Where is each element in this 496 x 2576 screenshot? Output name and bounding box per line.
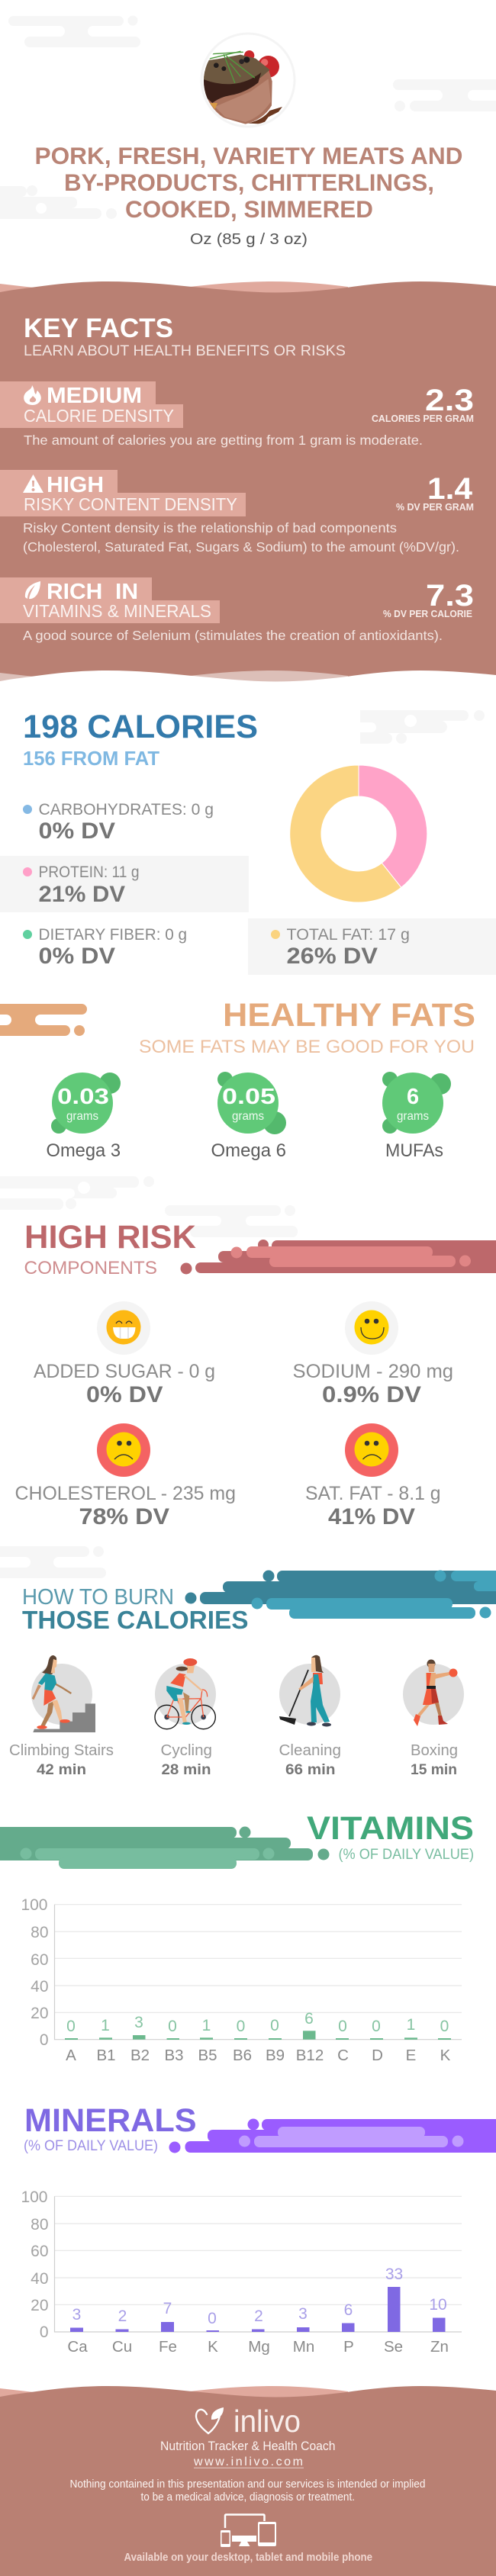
fact: high risky content density: Risky Content density is the relationship of bad components [23, 520, 397, 535]
activity: cleaning [279, 1655, 341, 1778]
heading: high risk: HIGH RISK [24, 1219, 196, 1256]
bar chart: vitamins: B1 [96, 2047, 116, 2064]
bar chart: vitamins: A [66, 2047, 76, 2064]
fat badge: omega 6: Omega 6 [211, 1140, 286, 1161]
bar chart: minerals: 2 [254, 2307, 263, 2325]
fat badge: omega 6: grams [232, 1110, 264, 1123]
bar chart: vitamins: 60 [31, 1951, 49, 1969]
bar chart: vitamins: 1 [407, 2016, 415, 2034]
bar chart: minerals: K [208, 2338, 218, 2356]
bar chart: vitamins [21, 1896, 462, 2064]
heading: key facts: KEY FACTS [24, 314, 173, 343]
bar chart: vitamins: 100 [21, 1896, 47, 1914]
risk item: sodium: 0.9% DV [322, 1382, 421, 1407]
panel: minerals [21, 2102, 462, 2356]
bar chart: vitamins: 0 [237, 2018, 245, 2035]
bar chart: vitamins: E [406, 2047, 416, 2064]
icon: woman climbing stairs [32, 1655, 95, 1732]
heading: how to burn: HOW TO BURN [22, 1585, 174, 1610]
legend: dietary fiber: DIETARY FIBER: 0 g [38, 926, 187, 944]
bar chart: minerals: 10 [429, 2296, 447, 2314]
activity: cycling: 28 min [162, 1761, 211, 1778]
bar chart: vitamins: C [337, 2047, 349, 2064]
icon: smiling face [354, 1311, 389, 1344]
fact: high risky content density: RISKY CONTENT DENSITY [24, 494, 237, 514]
activity: boxing: 15 min [411, 1761, 457, 1778]
fact: rich in vitamins and minerals [0, 577, 474, 643]
legend: carbohydrates: 0% DV [38, 818, 115, 844]
bar chart: vitamins: B3 [164, 2047, 184, 2064]
icon: leaf [25, 581, 40, 599]
bar chart: vitamins: 80 [31, 1924, 49, 1941]
fact: rich in vitamins and minerals: 7.3 [426, 579, 474, 613]
fact: medium calorie density: CALORIES PER GRAM [372, 413, 474, 424]
icon: boxer [414, 1660, 458, 1726]
activity: climbing stairs: Climbing Stairs [9, 1742, 114, 1759]
title: COOKED, SIMMERED [125, 195, 373, 223]
bar chart: vitamins: 0 [168, 2018, 177, 2035]
risk item: added sugar: 0% DV [86, 1382, 163, 1407]
bar chart: minerals: Fe [159, 2338, 177, 2356]
fat badge: omega 3: grams [66, 1110, 98, 1123]
activity: climbing stairs: 42 min [37, 1761, 86, 1778]
heading: vitamins: VITAMINS [307, 1810, 474, 1847]
fact: rich in vitamins and minerals: VITAMINS & MINERALS [23, 601, 211, 621]
fact: high risky content density: (Cholesterol, Saturated Fat, Sugars & Sodium) to the amount (%DV/gr). [23, 539, 459, 555]
fat badge: omega 6: 0.05 [222, 1085, 275, 1109]
fact: high risky content density: % DV PER GRAM [396, 502, 474, 513]
heading: how to burn: THOSE CALORIES [22, 1606, 249, 1634]
fact: rich in vitamins and minerals: % DV PER CALORIE [383, 609, 472, 619]
heading: calories [23, 709, 258, 770]
panel: calories [0, 709, 496, 975]
bar chart: minerals: 20 [31, 2297, 49, 2314]
risk item: saturated fat: SAT. FAT - 8.1 g [305, 1483, 441, 1504]
activity: boxing: Boxing [411, 1742, 458, 1759]
bar chart: minerals: 3 [298, 2305, 308, 2323]
heading: minerals: MINERALS [24, 2102, 197, 2139]
fat badge: omega 3 [46, 1073, 121, 1161]
heading: high risk [24, 1219, 196, 1278]
donut chart [290, 765, 427, 902]
risk item: cholesterol [15, 1423, 236, 1529]
bar chart: vitamins: B6 [233, 2047, 252, 2064]
icon: grinning face [107, 1311, 140, 1344]
heading: vitamins [307, 1810, 474, 1863]
bar chart: minerals: 0 [208, 2310, 217, 2327]
fat badge: omega 3: 0.03 [57, 1085, 109, 1109]
fat badge: mufas: 6 [407, 1085, 419, 1109]
legend: total fat [248, 918, 496, 975]
fact: rich in vitamins and minerals: RICH IN [47, 580, 138, 604]
risk item: added sugar: ADDED SUGAR - 0 g [34, 1361, 215, 1382]
legend: protein: PROTEIN: 11 g [38, 863, 139, 881]
panel: vitamins [21, 1810, 474, 2064]
panel: footer [0, 2386, 496, 2576]
logo: inlivo [196, 2404, 301, 2439]
bar chart: vitamins: 6 [304, 2010, 314, 2028]
bar chart: minerals: Zn [430, 2338, 449, 2356]
title [35, 142, 462, 223]
legend: total fat: 26% DV [287, 944, 378, 969]
icon: warning triangle [23, 474, 43, 493]
icon: devices [221, 2514, 276, 2547]
legend: total fat: TOTAL FAT: 17 g [287, 926, 410, 944]
fact: medium calorie density: 2.3 [425, 384, 474, 417]
disclaimer: Nothing contained in this presentation and our services is intended or implied [70, 2478, 426, 2491]
heading: how to burn [22, 1585, 249, 1634]
heading: key facts [24, 314, 346, 359]
bar chart: minerals: Ca [67, 2338, 88, 2356]
bar chart: minerals: 60 [31, 2243, 49, 2260]
bar chart: vitamins: 20 [31, 2005, 49, 2022]
fact: high risky content density [0, 470, 474, 555]
legend: carbohydrates: CARBOHYDRATES: 0 g [38, 801, 214, 818]
heading: key facts: LEARN ABOUT HEALTH BENEFITS OR RISKS [24, 343, 346, 359]
legend: protein: 21% DV [38, 882, 125, 907]
panel: healthy fats [46, 997, 475, 1161]
heading: calories: 198 CALORIES [23, 709, 258, 745]
bar chart: vitamins: 40 [31, 1978, 49, 1996]
bar chart: minerals: 7 [163, 2300, 172, 2317]
bar chart: minerals: P [343, 2338, 354, 2356]
bar chart: minerals: Se [384, 2338, 403, 2356]
risk item: sodium: SODIUM - 290 mg [293, 1361, 453, 1382]
fact: medium calorie density [0, 381, 474, 448]
bar chart: vitamins: 0 [338, 2018, 347, 2035]
icon: sad face [107, 1433, 140, 1466]
fat badge: mufas: MUFAs [385, 1140, 443, 1161]
fact: high risky content density: 1.4 [427, 472, 473, 506]
bar chart: minerals: 80 [31, 2216, 49, 2233]
heading: vitamins: (% OF DAILY VALUE) [339, 1846, 474, 1863]
bar chart: minerals: Mn [293, 2338, 314, 2356]
panel: high risk components [15, 1219, 453, 1529]
fat badge: mufas: grams [397, 1110, 429, 1123]
fat badge: omega 3: Omega 3 [46, 1140, 121, 1161]
activity: boxing [403, 1660, 464, 1778]
legend: dietary fiber [23, 926, 187, 969]
bar chart: minerals: Mg [248, 2338, 270, 2356]
bar chart: vitamins: B9 [266, 2047, 285, 2064]
bar chart: vitamins: B12 [296, 2047, 324, 2064]
bar chart: vitamins: 1 [202, 2017, 211, 2034]
food photo: grilled meat [201, 34, 295, 127]
risk item: cholesterol: 78% DV [79, 1504, 169, 1529]
fact: medium calorie density: The amount of calories you are getting from 1 gram is moderate. [24, 433, 423, 448]
fact: medium calorie density: MEDIUM [47, 384, 142, 408]
fact: high risky content density: HIGH [47, 473, 104, 497]
icon: woman cycling [155, 1658, 215, 1729]
legend: carbohydrates [23, 801, 214, 844]
serving size: Oz (85 g / 3 oz) [190, 231, 308, 248]
bar chart: vitamins: B5 [198, 2047, 217, 2064]
bar chart: minerals [21, 2188, 462, 2356]
legend: dietary fiber: 0% DV [38, 944, 115, 969]
activity: cleaning: Cleaning [279, 1742, 341, 1759]
activity: cleaning: 66 min [285, 1761, 336, 1778]
bar chart: minerals: 33 [385, 2266, 403, 2283]
activity: climbing stairs [9, 1655, 114, 1778]
bar chart: vitamins: 1 [101, 2017, 110, 2034]
heading: calories: 156 FROM FAT [23, 747, 159, 770]
bar chart: minerals: Cu [112, 2338, 132, 2356]
activity: cycling [155, 1658, 216, 1778]
availability note: Available on your desktop, tablet and mobile phone [124, 2552, 372, 2564]
heading: minerals: (% OF DAILY VALUE) [24, 2137, 158, 2154]
heading: healthy fats [139, 997, 475, 1057]
bar chart: vitamins: 3 [134, 2014, 143, 2031]
icon: flame [24, 385, 41, 405]
bar chart: vitamins: B2 [130, 2047, 150, 2064]
panel: key facts [0, 281, 496, 694]
bar chart: minerals: 0 [40, 2324, 49, 2341]
heading: high risk: COMPONENTS [24, 1258, 157, 1278]
bar chart: vitamins: 0 [440, 2018, 449, 2035]
risk item: saturated fat [305, 1423, 441, 1529]
tagline: Nutrition Tracker & Health Coach [160, 2439, 336, 2453]
title: BY-PRODUCTS, CHITTERLINGS, [64, 169, 434, 196]
panel: how to burn those calories [9, 1585, 464, 1778]
disclaimer [70, 2478, 426, 2504]
bar chart: minerals: 2 [118, 2307, 127, 2325]
bar chart: vitamins: 0 [66, 2018, 76, 2035]
risk item: cholesterol: CHOLESTEROL - 235 mg [15, 1483, 236, 1504]
heading: healthy fats: HEALTHY FATS [223, 997, 475, 1034]
fat badge: mufas [382, 1072, 451, 1161]
bar chart: vitamins: K [440, 2047, 451, 2064]
bar chart: minerals: 100 [21, 2188, 47, 2206]
bar chart: vitamins: D [372, 2047, 383, 2064]
legend: protein [0, 856, 249, 912]
bar chart: minerals: 6 [344, 2301, 353, 2319]
title: PORK, FRESH, VARIETY MEATS AND [35, 142, 462, 169]
heading: healthy fats: SOME FATS MAY BE GOOD FOR YOU [139, 1037, 475, 1057]
bar chart: vitamins: 0 [270, 2017, 279, 2034]
risk item: saturated fat: 41% DV [328, 1504, 415, 1529]
activity: cycling: Cycling [160, 1742, 212, 1759]
icon: sad face [354, 1433, 389, 1466]
logo: inlivo: inlivo [234, 2404, 301, 2439]
bar chart: minerals: 40 [31, 2270, 49, 2288]
heading: minerals [24, 2102, 197, 2154]
disclaimer: to be a medical advice, diagnosis or treatment. [140, 2491, 355, 2504]
risk item: sodium [293, 1301, 453, 1407]
icon: woman sweeping [279, 1655, 331, 1727]
fat badge: omega 6 [211, 1072, 286, 1161]
fact: medium calorie density: CALORIE DENSITY [24, 406, 174, 426]
bar chart: vitamins: 0 [372, 2018, 381, 2035]
fact: rich in vitamins and minerals: A good source of Selenium (stimulates the creation of antioxidants). [23, 628, 443, 643]
website link: www.inlivo.com [193, 2455, 303, 2468]
risk item: added sugar [34, 1301, 215, 1407]
bar chart: minerals: 3 [72, 2306, 81, 2324]
bar chart: vitamins: 0 [40, 2031, 49, 2049]
